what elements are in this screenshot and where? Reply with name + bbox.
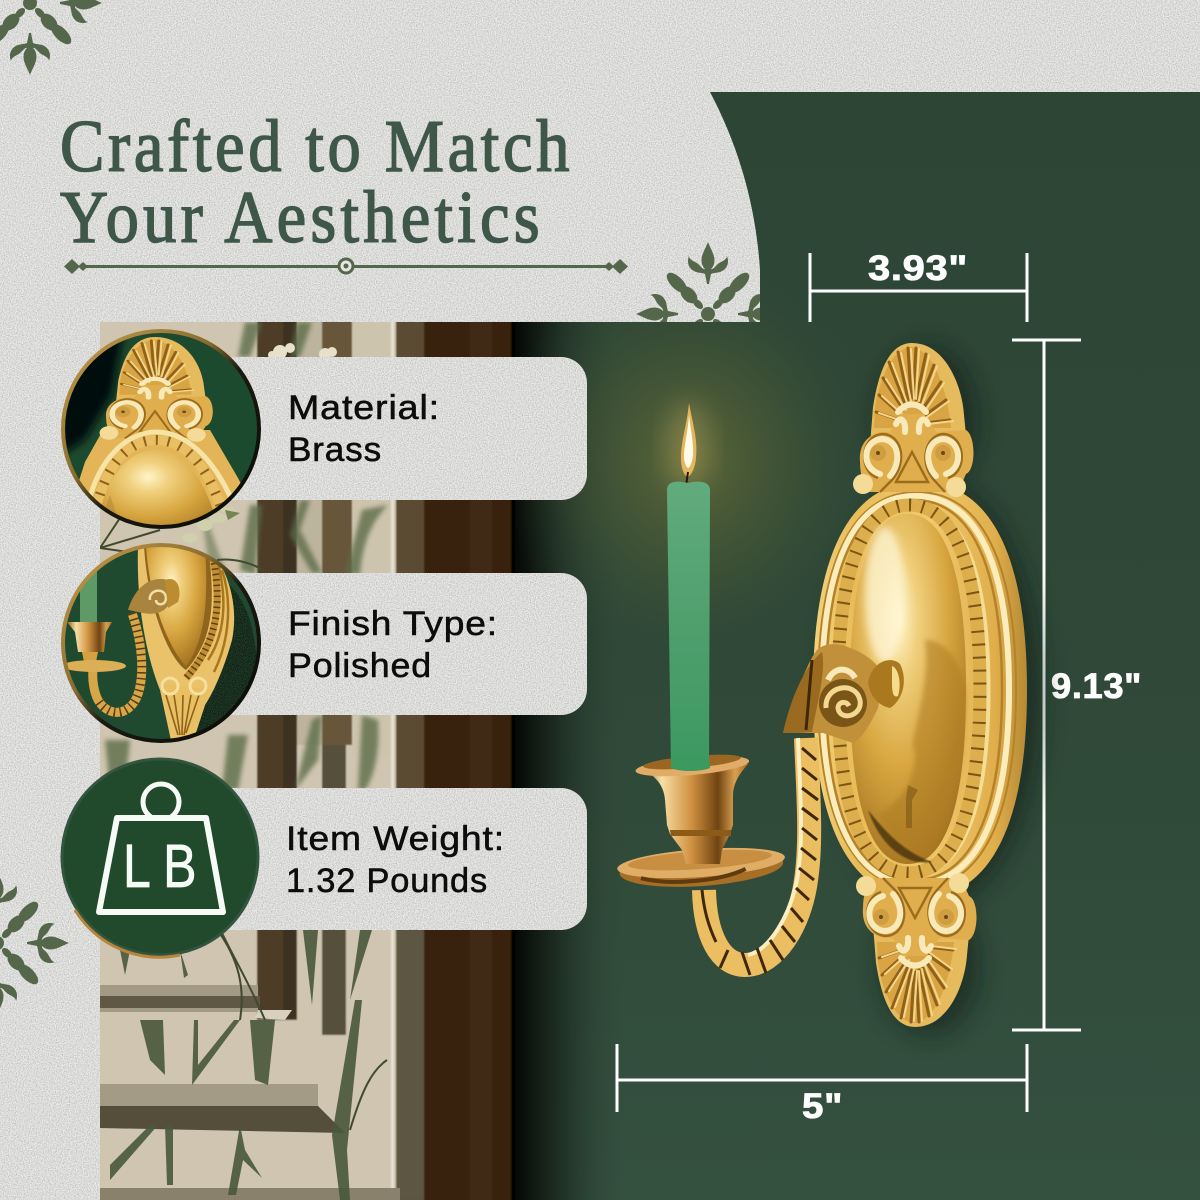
brass sconce [616,343,1042,1035]
dimension: depth 5 [617,1044,1027,1126]
candle cup and saucer [616,751,786,892]
title divider [64,259,628,274]
sconce shadow [826,345,1042,1035]
text: item weight: 1.32 Pounds [286,862,488,900]
ornament: top-left flourish [0,0,102,75]
curved rope arm [702,738,818,975]
thumbnail: crest close-up [61,329,261,529]
text: finish type: Finish Type: [288,605,498,643]
text: material [288,389,440,469]
icon: LB weight badge [62,759,258,957]
title: Crafted to Match [60,106,569,188]
text: finish type [288,605,498,685]
ornament: bottom-right header flourish [636,242,760,322]
bottom crest [856,873,976,1027]
panel: material pill [200,357,587,500]
dimension: depth 5: 5" [802,1087,843,1126]
icon: LB weight badge: LB [123,832,197,900]
panel: interior photo with wall mouldings and leaves [90,315,525,1200]
dimension: width 3.93: 3.93" [868,249,968,288]
ornament: left flourish [0,871,69,1015]
panel: weight pill [200,788,587,930]
title: Your Aesthetics [60,177,540,259]
dimension: width 3.93 [810,249,1027,322]
title [60,106,569,259]
thumbnail: side view of sconce [62,545,259,745]
panel: finish pill [200,573,587,715]
dimension: height 9.13 [1012,340,1142,1030]
text: item weight: Item Weight: [286,820,505,858]
text: material: Brass [288,431,382,469]
dome [850,514,966,864]
text: item weight [286,820,505,900]
backplate oval [813,482,1027,898]
top crest [853,343,974,497]
panel: dark green wall [500,92,1200,1200]
candle with flame [666,401,710,770]
text: material: Material: [288,389,440,427]
dimension: height 9.13: 9.13" [1051,667,1142,706]
text: finish type: Polished [288,647,432,685]
arm scroll [783,644,904,743]
